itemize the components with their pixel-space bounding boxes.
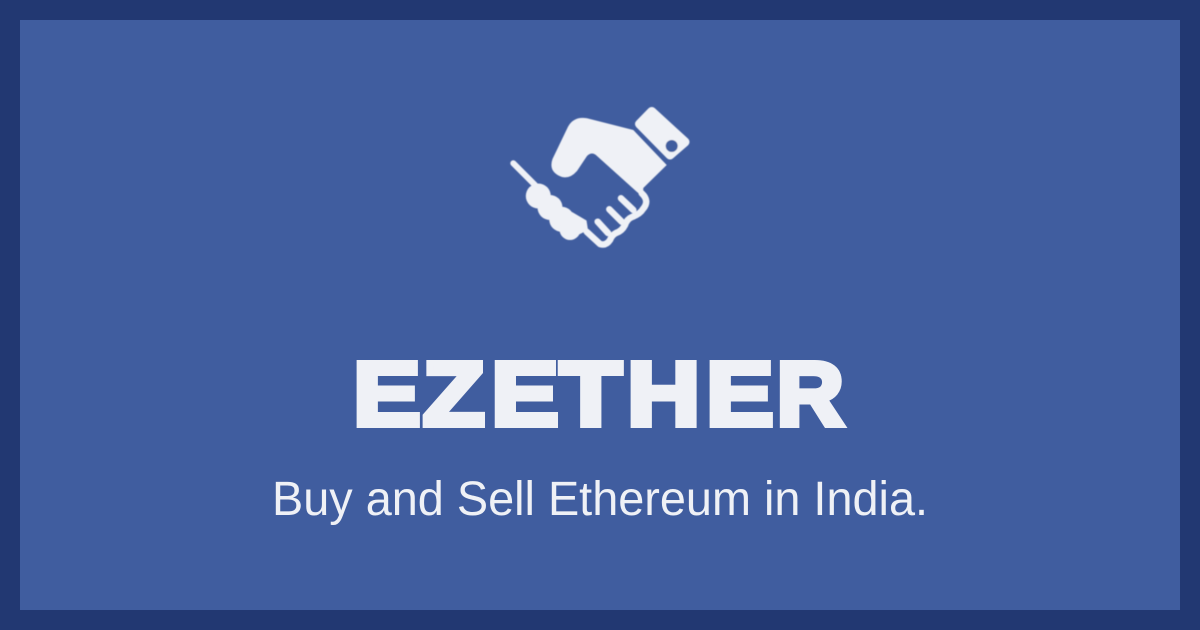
tagline: Buy and Sell Ethereum in India. <box>272 473 928 526</box>
title: EZETHE <box>353 345 774 445</box>
title: R <box>777 344 844 445</box>
icon: handshake <box>513 112 685 244</box>
